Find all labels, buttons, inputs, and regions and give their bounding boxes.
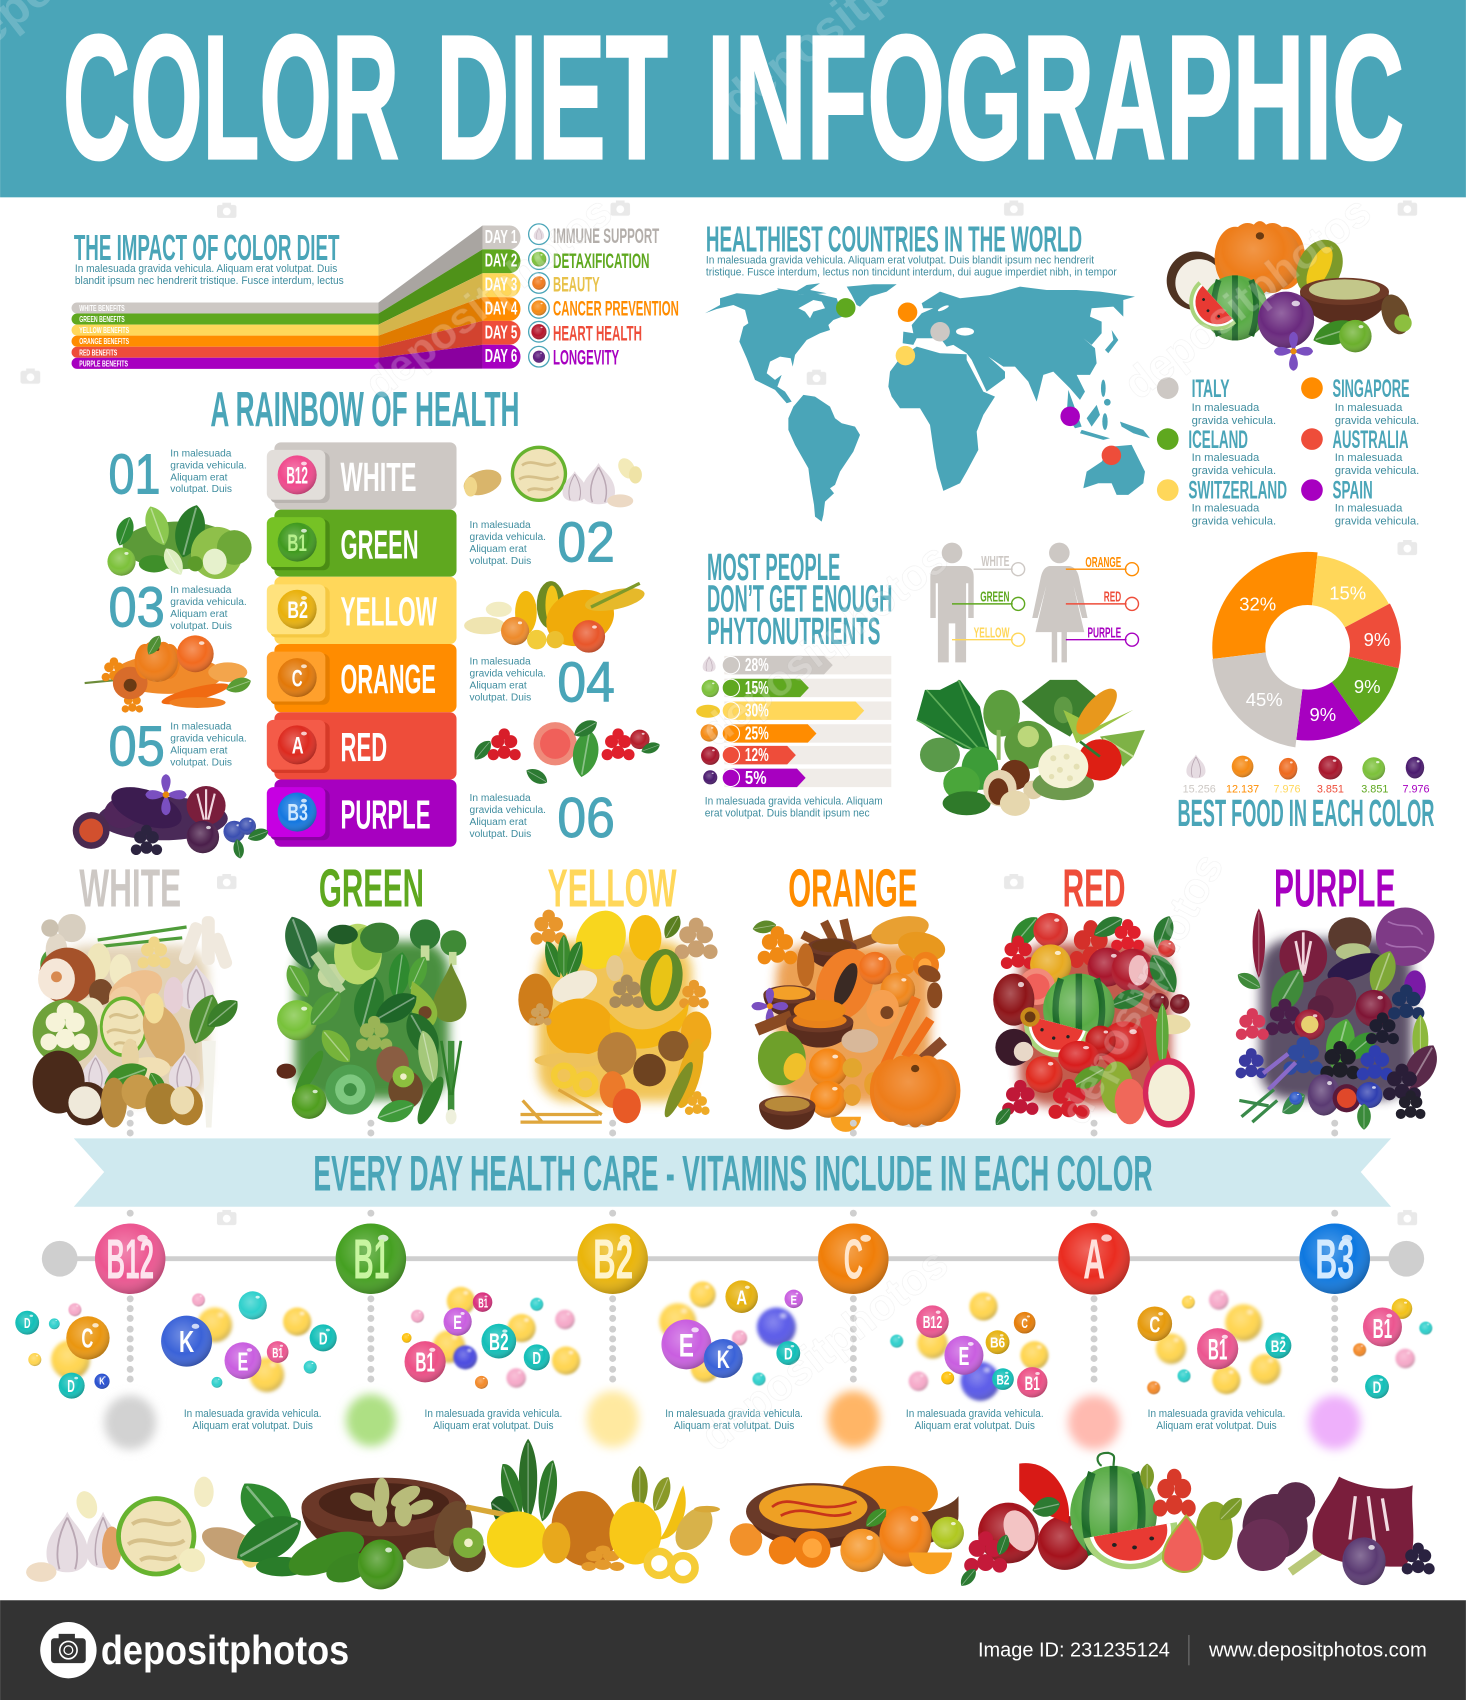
captions: In malesuada gravida vehicula. <box>425 1408 562 1420</box>
countries description <box>706 254 1117 278</box>
rainbow descriptions: In malesuada <box>470 793 531 804</box>
website: www.depositphotos.com <box>1208 1639 1427 1662</box>
food column: yellow <box>518 902 718 1123</box>
panel: healthiest countries <box>705 220 1419 528</box>
percentage bars: 5% <box>745 767 767 788</box>
heading: countries: HEALTHIEST COUNTRIES IN THE WORLD <box>706 220 1082 260</box>
country legend: In malesuada <box>1335 402 1403 414</box>
header band with title <box>0 0 1466 197</box>
rainbow descriptions: Aliquam erat <box>470 544 527 555</box>
small vitamins: group 2 <box>161 1291 337 1392</box>
donut chart: 32% <box>1239 593 1276 614</box>
color tab: green: B1 <box>287 530 307 557</box>
small vitamins: group 2: K <box>179 1326 194 1359</box>
benefit list with icons: HEART HEALTH <box>553 320 642 345</box>
country legend: In malesuada <box>1192 503 1260 515</box>
color tab: white: WHITE <box>341 454 416 500</box>
heading: rainbow: A RAINBOW OF HEALTH <box>210 383 519 437</box>
phytonutrients note: erat volutpat. Duis blandit ipsum nec <box>705 807 870 819</box>
color tab: orange: C <box>292 665 303 692</box>
watermarks: depositphotos <box>1051 846 1233 1132</box>
country legend: SPAIN <box>1333 477 1373 505</box>
panel: impact of color diet <box>72 223 679 369</box>
watermarks: depositphotos <box>356 187 621 409</box>
small vitamins: group 6: B2 <box>1271 1338 1286 1356</box>
rainbow descriptions: Aliquam erat <box>470 680 527 691</box>
food icons row <box>1186 754 1424 780</box>
ribbon chart: DAY 4 <box>485 297 518 318</box>
donut chart: 9% <box>1364 629 1390 650</box>
impact description: In malesuada gravida vehicula. Aliquam erat volutpat. Duis <box>75 263 337 275</box>
small vitamins: group 2: B1 <box>272 1344 283 1360</box>
country legend: In malesuada <box>1335 503 1403 515</box>
column headings: GREEN <box>319 858 424 918</box>
heading: phytonutrients <box>707 547 892 653</box>
color tab: orange: ORANGE <box>341 656 436 702</box>
country legend: gravida vehicula. <box>1192 516 1276 528</box>
donut chart <box>1212 552 1401 747</box>
food: orange small <box>85 633 253 713</box>
color tab: yellow <box>267 577 457 644</box>
rainbow descriptions: gravida vehicula. <box>470 805 546 816</box>
percentage bars <box>696 654 891 788</box>
rainbow descriptions: volutpat. Duis <box>470 692 531 703</box>
percentage bars: 30% <box>745 700 769 721</box>
logo <box>40 1622 349 1678</box>
rainbow descriptions: volutpat. Duis <box>170 621 232 632</box>
country legend: gravida vehicula. <box>1335 415 1419 427</box>
small vitamins: group 4: E <box>790 1292 797 1307</box>
blurred colour spheres <box>104 1391 1361 1450</box>
ribbon chart: PURPLE BENEFITS <box>79 359 128 368</box>
captions: Aliquam erat volutpat. Duis <box>674 1420 794 1432</box>
vitamin ball: B2: B2 <box>593 1227 633 1290</box>
benefit list with icons: CANCER PREVENTION <box>553 295 679 320</box>
food: red small <box>470 716 662 788</box>
benefit list with icons: IMMUNE SUPPORT <box>553 223 659 248</box>
small vitamins: group 6: B1 <box>1208 1335 1227 1367</box>
food strip: bottom <box>26 1439 1435 1589</box>
captions: In malesuada gravida vehicula. <box>1148 1408 1285 1420</box>
vitamin ball: C: C <box>844 1227 863 1290</box>
food values: 7.976 <box>1402 784 1430 796</box>
small vitamins: group 5: B2 <box>996 1372 1010 1388</box>
vitamin ball: B12: B12 <box>106 1227 154 1290</box>
color tab: purple: B3 <box>287 800 308 827</box>
food column: purple <box>1234 907 1445 1130</box>
small vitamins: group 5 <box>890 1292 1048 1401</box>
captions: Aliquam erat volutpat. Duis <box>915 1420 1035 1432</box>
rainbow descriptions <box>170 448 546 840</box>
rainbow numbers: 06 <box>557 786 615 849</box>
rainbow numbers: 04 <box>557 650 615 713</box>
food column: orange <box>751 911 960 1132</box>
food values: 12.137 <box>1226 784 1259 796</box>
color tab: white <box>267 442 457 510</box>
vitamin timeline <box>42 1223 1424 1295</box>
country legend: gravida vehicula. <box>1335 465 1419 477</box>
ribbon chart: DAY 2 <box>485 250 517 271</box>
watermarks <box>21 187 1417 1461</box>
impact description <box>75 263 344 287</box>
rainbow descriptions: volutpat. Duis <box>170 757 232 768</box>
ribbon chart: ORANGE BENEFITS <box>79 337 129 346</box>
donut chart: 15% <box>1329 583 1366 604</box>
gender labels: PURPLE <box>1088 624 1121 641</box>
ribbon chart: GREEN BENEFITS <box>79 315 125 324</box>
map markers <box>836 298 1121 465</box>
vitamin ball: C <box>818 1224 889 1294</box>
rainbow numbers: 02 <box>557 511 615 574</box>
column headings: RED <box>1063 858 1125 918</box>
food values: 7.976 <box>1273 784 1301 796</box>
country legend: SWITZERLAND <box>1188 477 1287 505</box>
phytonutrients note: In malesuada gravida vehicula. Aliquam <box>705 795 883 807</box>
rainbow descriptions: Aliquam erat <box>170 746 228 757</box>
color tab: red: RED <box>341 724 387 770</box>
benefit list with icons: DETAXIFICATION <box>553 248 650 273</box>
country legend: In malesuada <box>1192 452 1260 464</box>
country legend: ITALY <box>1192 375 1230 403</box>
small vitamins: group 1: K <box>99 1377 105 1388</box>
rainbow numbers <box>109 442 615 849</box>
small vitamins: group 7: B1 <box>1373 1312 1392 1344</box>
country legend: gravida vehicula. <box>1192 415 1276 427</box>
world map <box>705 283 1150 522</box>
ribbon chart: DAY 6 <box>485 345 517 366</box>
vitamin ball: B3: B3 <box>1315 1227 1354 1290</box>
small vitamins: group 5: E <box>959 1341 969 1371</box>
connector dots <box>127 1110 1338 1383</box>
food: purple small <box>73 774 270 859</box>
footer <box>0 1600 1466 1700</box>
ribbon chart <box>72 226 520 369</box>
rainbow descriptions: volutpat. Duis <box>470 829 531 840</box>
small vitamins: group 3: B2 <box>489 1329 509 1356</box>
phytonutrients note <box>705 795 883 819</box>
small vitamins: group 3: D <box>532 1348 541 1368</box>
rainbow descriptions: Aliquam erat <box>170 609 228 620</box>
color tab: red: A <box>292 733 304 760</box>
captions: In malesuada gravida vehicula. <box>184 1408 322 1420</box>
small vitamins: group 1: D <box>24 1315 30 1332</box>
captions: In malesuada gravida vehicula. <box>665 1408 803 1420</box>
column headings: YELLOW <box>548 858 677 918</box>
small vitamins: group 2: E <box>238 1346 248 1376</box>
gender labels: ORANGE <box>1085 554 1121 571</box>
rainbow descriptions: In malesuada <box>470 657 531 668</box>
image id: Image ID: 231235124 <box>978 1639 1170 1662</box>
title <box>63 0 1404 196</box>
food: green small <box>107 501 252 579</box>
captions: In malesuada gravida vehicula. <box>906 1408 1044 1420</box>
donut chart: 9% <box>1309 704 1336 725</box>
rainbow descriptions: Aliquam erat <box>470 817 527 828</box>
benefit list with icons <box>529 223 679 369</box>
small vitamins: group 2: D <box>319 1328 328 1348</box>
small vitamins: group 4: A <box>736 1286 747 1309</box>
vitamin ball: B2 <box>577 1224 648 1294</box>
food: top right mix <box>1167 221 1415 371</box>
heading: impact: THE IMPACT OF COLOR DIET <box>74 228 340 268</box>
food values: 15.256 <box>1183 784 1216 796</box>
rainbow numbers: 05 <box>109 714 165 777</box>
column headings: ORANGE <box>788 858 917 918</box>
color tab: green: GREEN <box>341 521 419 567</box>
figure: man <box>930 543 974 662</box>
heading: phytonutrients: MOST PEOPLE <box>707 547 840 589</box>
impact description: blandit ipsum nec hendrerit tristique. Fusce interdum, lectus <box>75 275 344 287</box>
column headings: WHITE <box>79 858 181 918</box>
rainbow descriptions: In malesuada <box>170 722 232 733</box>
vitamin ball: B1 <box>336 1224 406 1294</box>
countries description: In malesuada gravida vehicula. Aliquam erat volutpat. Duis blandit ipsum nec hendrerit <box>706 254 1094 266</box>
watermarks: depositphotos <box>692 1239 957 1461</box>
figure: woman <box>1032 543 1088 662</box>
panel: best food in each color <box>1178 552 1434 835</box>
color tab: white: B12 <box>286 463 308 490</box>
small vitamins: group 1: D <box>67 1376 75 1396</box>
small vitamins: group 5: B12 <box>923 1312 942 1332</box>
donut chart: 9% <box>1354 676 1381 697</box>
food values: 3.851 <box>1317 784 1344 796</box>
countries description: tristique. Fusce interdum, lectus non tincidunt interdum, dui augue imperdiet nibh, in tempor <box>706 266 1117 278</box>
food: white small <box>460 446 642 507</box>
country legend: gravida vehicula. <box>1192 465 1276 477</box>
small vitamins: group 3: E <box>453 1312 462 1334</box>
small vitamins: group 7 <box>1353 1298 1432 1399</box>
rainbow descriptions: In malesuada <box>170 448 232 459</box>
ribbon chart: DAY 3 <box>485 274 517 295</box>
watermarks: depositphotos <box>1115 187 1380 409</box>
country legend: ICELAND <box>1188 426 1248 454</box>
food column: red <box>992 911 1195 1129</box>
small vitamins: group 3 <box>402 1287 580 1389</box>
color tab: red <box>267 712 457 780</box>
vitamin ball: B1: B1 <box>354 1227 389 1290</box>
vitamin ball: A <box>1058 1223 1130 1295</box>
gender labels: RED <box>1104 589 1121 606</box>
benefit list with icons: BEAUTY <box>553 272 600 297</box>
color tab: purple: PURPLE <box>341 791 431 837</box>
column headings <box>79 858 1395 918</box>
country legend: In malesuada <box>1192 402 1260 414</box>
small vitamins: group 3: B1 <box>415 1345 435 1377</box>
benefit list with icons: LONGEVITY <box>553 344 619 369</box>
small vitamins: group 7: D <box>1373 1379 1382 1397</box>
rainbow descriptions: In malesuada <box>470 520 531 531</box>
percentage bars: 12% <box>745 744 769 765</box>
rainbow descriptions: gravida vehicula. <box>170 734 247 745</box>
ribbon chart: WHITE BENEFITS <box>79 304 125 313</box>
vitamin ball: B3 <box>1299 1224 1370 1294</box>
small vitamins: group 1: C <box>81 1322 93 1354</box>
country legend: gravida vehicula. <box>1335 516 1419 528</box>
small vitamins: group 5: C <box>1021 1315 1028 1331</box>
ribbon chart: YELLOW BENEFITS <box>79 326 129 335</box>
country legend: In malesuada <box>1335 452 1403 464</box>
small vitamins: group 6: C <box>1149 1311 1160 1337</box>
donut chart: 45% <box>1246 689 1283 710</box>
gender labels: WHITE <box>981 553 1009 570</box>
rainbow numbers: 03 <box>109 576 165 639</box>
country legend <box>1157 375 1419 528</box>
captions: Aliquam erat volutpat. Duis <box>1156 1420 1277 1432</box>
rainbow descriptions: gravida vehicula. <box>170 597 247 608</box>
gender labels: GREEN <box>980 589 1009 606</box>
title: COLOR <box>63 0 399 196</box>
logo: depositphotos <box>101 1627 349 1673</box>
color tab: yellow: B2 <box>287 597 308 624</box>
percentage bars: 15% <box>745 677 769 698</box>
gender labels <box>952 553 1138 646</box>
small vitamins: group 1 <box>15 1303 110 1399</box>
percentage bars: 28% <box>745 654 769 675</box>
ribbon chart: RED BENEFITS <box>79 349 118 358</box>
small vitamins: group 5: B6 <box>990 1335 1005 1352</box>
food: yellow small <box>464 581 647 655</box>
small vitamins: group 4 <box>659 1280 803 1386</box>
heading: phytonutrients: PHYTONUTRIENTS <box>707 611 880 653</box>
captions: Aliquam erat volutpat. Duis <box>433 1420 554 1432</box>
watermarks: depositphotos <box>692 534 957 756</box>
food column: green <box>277 912 467 1128</box>
color tab: yellow: YELLOW <box>341 589 437 635</box>
panel: phytonutrients: DON’T GET ENOUGH <box>707 578 892 620</box>
food values: 3.851 <box>1361 784 1388 796</box>
rainbow descriptions: gravida vehicula. <box>470 532 546 543</box>
panel: phytonutrients <box>696 543 1145 819</box>
small vitamins: group 6 <box>1137 1290 1291 1394</box>
color tab: green <box>267 510 457 577</box>
small vitamins: group 3: B1 <box>478 1296 488 1311</box>
rainbow descriptions: In malesuada <box>170 585 232 596</box>
small vitamins: group 4: E <box>679 1327 694 1363</box>
vitamin ball: A: A <box>1083 1227 1105 1290</box>
percentage bars: 25% <box>745 722 769 743</box>
gender labels: YELLOW <box>974 624 1010 641</box>
rainbow descriptions: Aliquam erat <box>170 472 228 483</box>
rainbow descriptions: volutpat. Duis <box>470 556 531 567</box>
color tab: purple <box>267 780 457 847</box>
small vitamins: group 4: D <box>784 1346 793 1364</box>
ribbon banner <box>74 1138 1391 1207</box>
rainbow descriptions: gravida vehicula. <box>470 669 546 680</box>
panel: rainbow of health <box>73 383 662 859</box>
captions <box>184 1408 1285 1432</box>
food: vegetables <box>917 680 1145 816</box>
small vitamins: group 5: B1 <box>1025 1373 1040 1395</box>
rainbow numbers: 01 <box>109 442 161 505</box>
color tab: orange <box>267 644 457 712</box>
ribbon chart: DAY 5 <box>485 321 517 342</box>
rainbow descriptions: volutpat. Duis <box>170 484 232 495</box>
rainbow descriptions: gravida vehicula. <box>170 460 247 471</box>
food column: white <box>33 914 244 1128</box>
ribbon chart: DAY 1 <box>485 226 517 247</box>
captions: Aliquam erat volutpat. Duis <box>193 1420 313 1432</box>
small vitamins: group 4: K <box>717 1346 730 1374</box>
title: DIET <box>436 0 668 196</box>
food values <box>1183 784 1430 796</box>
vitamin ball: B12 <box>95 1224 165 1294</box>
